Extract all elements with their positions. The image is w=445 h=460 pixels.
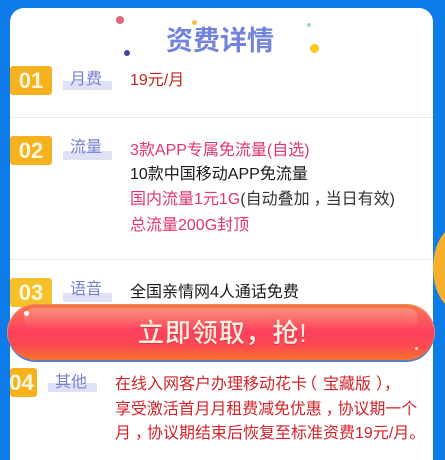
section 04: other	[10, 368, 425, 442]
label highlight 02	[63, 151, 112, 160]
data line 1: 3款APP专属免流量(自选)	[130, 142, 310, 159]
label 流量: 流量	[70, 139, 102, 156]
badge 01: 01	[19, 68, 43, 93]
divider 2	[10, 259, 433, 260]
label 其他: 其他	[55, 374, 87, 391]
other text line 3: 月，协议期结束后恢复至标准资费19元/月。	[115, 425, 425, 442]
button: claim now	[8, 305, 434, 360]
data line 2: 10款中国移动APP免流量	[130, 166, 308, 183]
section 03: voice	[10, 278, 299, 307]
section 01: monthly fee	[10, 66, 184, 95]
section 02: data	[10, 136, 395, 234]
title: 资费详情	[166, 26, 274, 56]
badge 03	[10, 278, 52, 307]
other text line 2: 享受激活首月月租费减免优惠，协议期一个	[115, 401, 417, 418]
data line 4: 总流量200G封顶	[130, 217, 249, 234]
decorative confetti dots	[116, 16, 319, 56]
badge 02	[10, 136, 52, 165]
label highlight 03	[63, 293, 112, 302]
badge 02: 02	[19, 138, 43, 163]
data line 3: 国内流量1元1G(自动叠加，当日有效)	[130, 191, 395, 208]
button gloss	[24, 308, 418, 328]
value 19元/月: 19元/月	[130, 72, 184, 89]
label 月费: 月费	[70, 71, 102, 88]
label 语音: 语音	[70, 281, 102, 298]
button sparkle small	[415, 347, 418, 350]
other text line 1: 在线入网客户办理移动花卡（ 宝藏版 ），	[115, 376, 400, 393]
icon: right decorative orange circle	[433, 232, 445, 304]
label highlight 01	[63, 81, 112, 90]
voice text: 全国亲情网4人通话免费	[130, 284, 299, 301]
badge 01	[10, 66, 52, 95]
button sparkle	[24, 311, 29, 316]
badge 03: 03	[19, 280, 43, 305]
divider 1	[10, 117, 433, 118]
button label: 立即领取，抢!	[138, 318, 308, 348]
label highlight 04	[48, 383, 97, 392]
